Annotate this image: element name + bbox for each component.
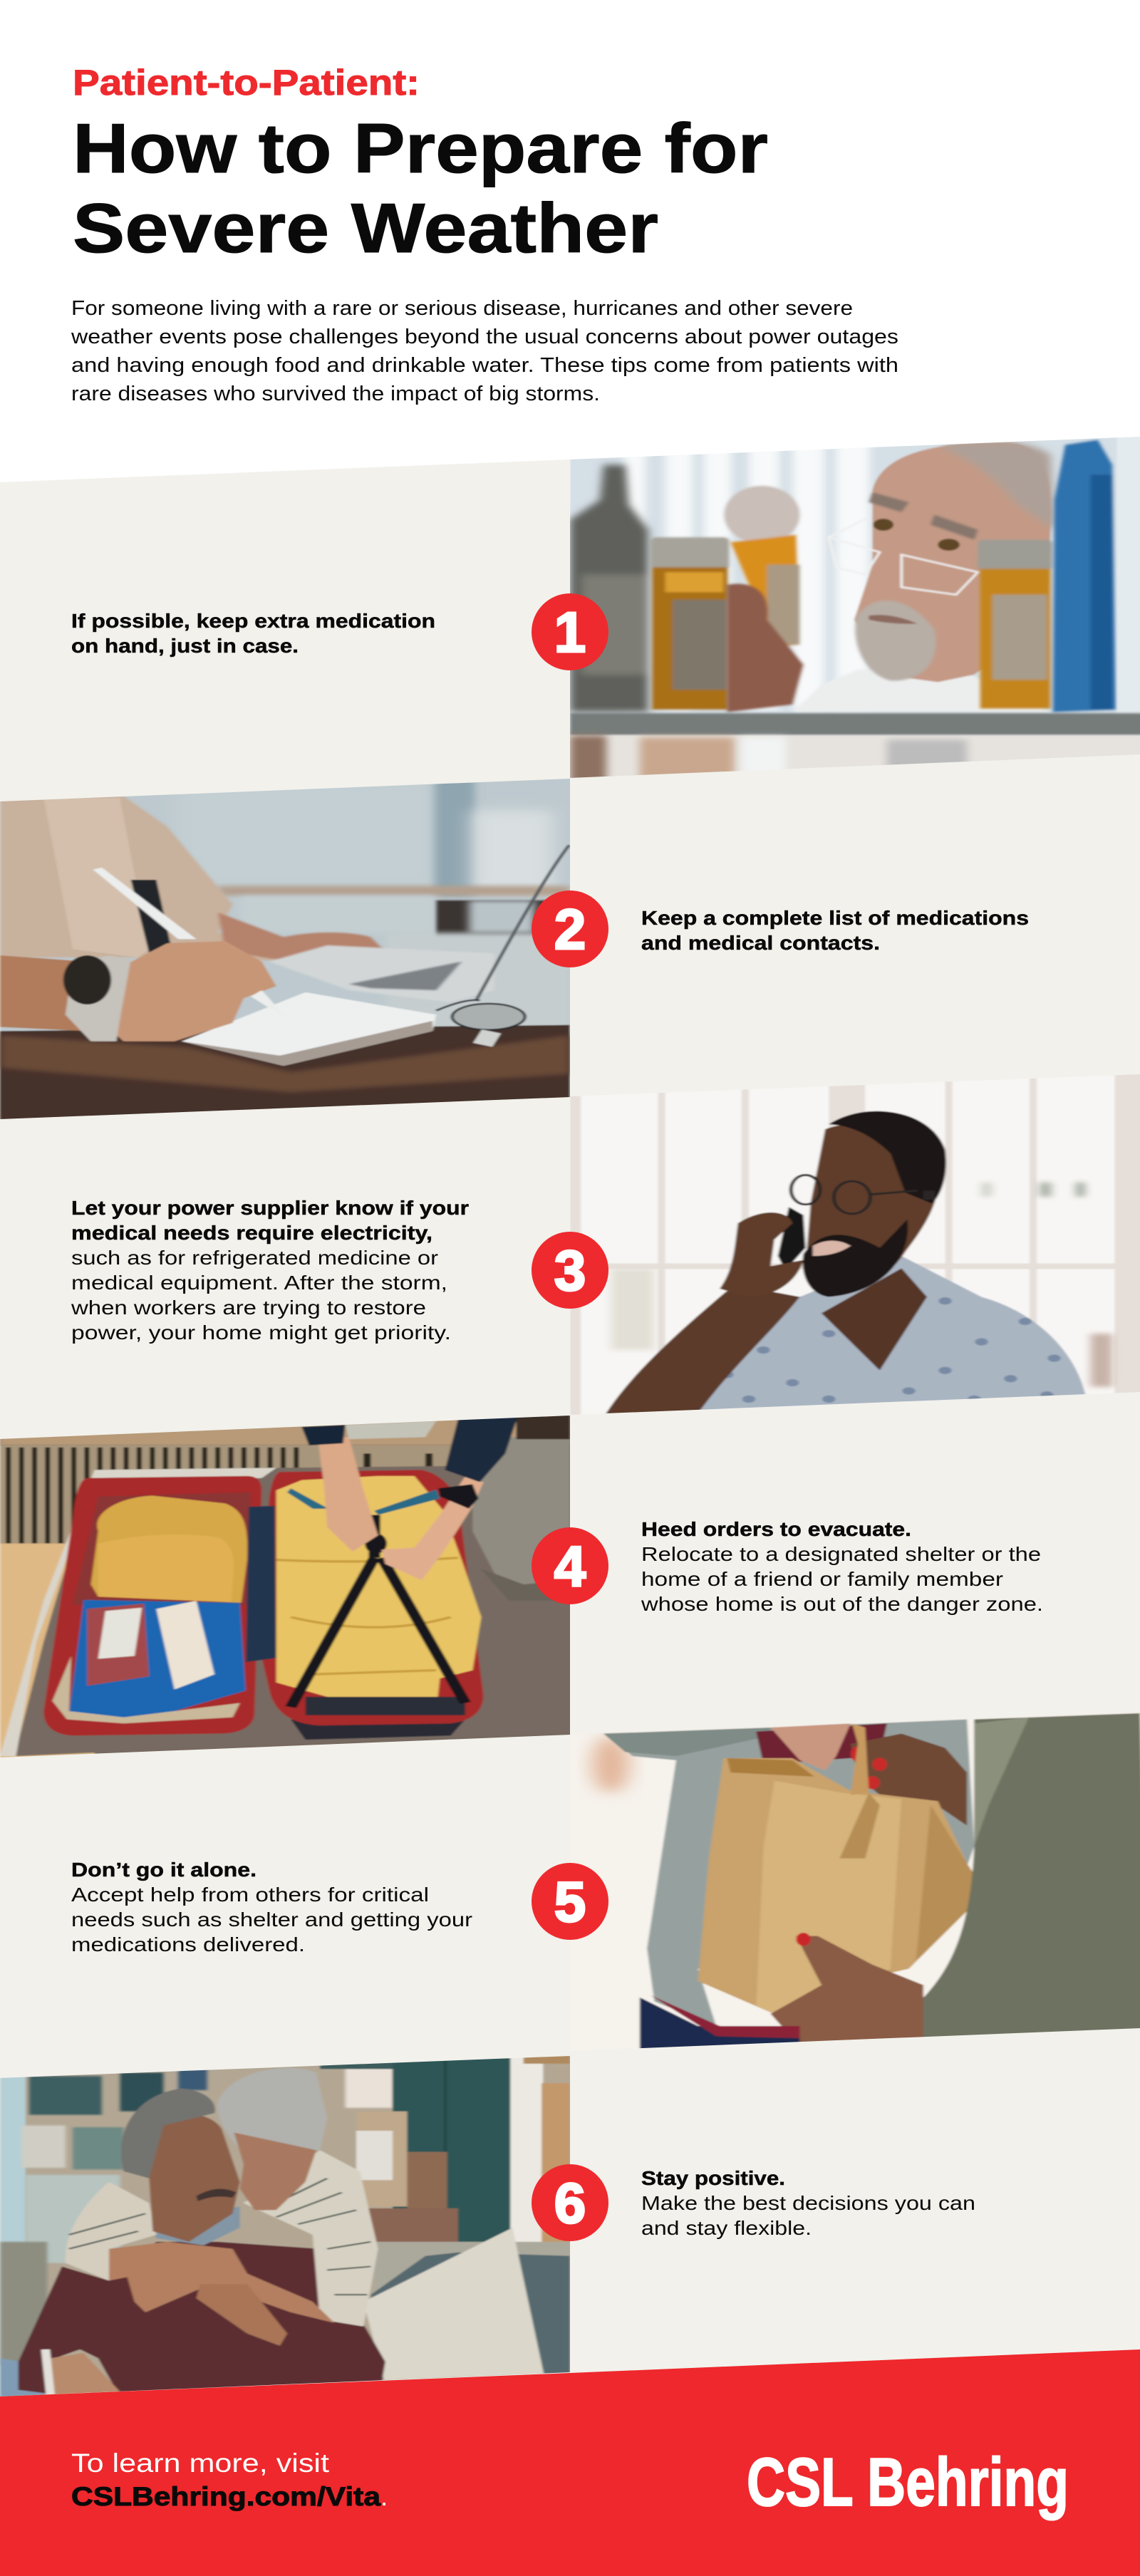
tip 6 text: Stay positive. (641, 2167, 785, 2189)
tip 4 text: whose home is out of the danger zone. (641, 1593, 1043, 1615)
number badge 5 (532, 1863, 608, 1940)
tip 3 text (71, 1197, 469, 1344)
number badge 5: 5 (554, 1870, 586, 1933)
header (71, 63, 898, 405)
tip 2 text: and medical contacts. (641, 932, 880, 954)
tip 3 text: medical needs require electricity, (71, 1222, 432, 1244)
number badge 6 (532, 2164, 608, 2241)
tip 1 text: If possible, keep extra medication (71, 610, 435, 632)
intro paragraph: weather events pose challenges beyond the usual concerns about power outages (71, 326, 898, 348)
number badge 4: 4 (554, 1534, 586, 1598)
call to action (71, 2448, 388, 2511)
number badge 1: 1 (554, 601, 586, 664)
tip 3 text: Let your power supplier know if your (71, 1197, 469, 1219)
tip 6 text: and stay flexible. (641, 2217, 812, 2239)
photo 6: older couple embracing (0, 2052, 581, 2404)
tip 4 text (641, 1518, 1043, 1615)
main title: Severe Weather (73, 189, 658, 267)
footer band (0, 2349, 1140, 2576)
number badge 2 (532, 890, 608, 967)
tip 3 text: such as for refrigerated medicine or (71, 1247, 438, 1269)
number badge 1 (532, 593, 608, 670)
tip 6 text: Make the best decisions you can (641, 2192, 975, 2214)
call to action: To learn more, visit (71, 2448, 330, 2478)
call to action: CSLBehring.com/Vita (71, 2482, 380, 2511)
intro paragraph (71, 297, 898, 405)
tip 5 text: needs such as shelter and getting your (71, 1908, 472, 1931)
tip 5 text: Don’t go it alone. (71, 1859, 256, 1881)
main title (73, 109, 768, 267)
call to action: . (380, 2482, 388, 2511)
tip 4 text: home of a friend or family member (641, 1568, 1003, 1590)
tip 3 text: power, your home might get priority. (71, 1321, 451, 1344)
tip 5 text: Accept help from others for critical (71, 1884, 429, 1906)
tip 2 text: Keep a complete list of medications (641, 907, 1029, 929)
photo 5: paper bag handed over (570, 1707, 1140, 2059)
number badge 6: 6 (554, 2171, 586, 2235)
photo 3: man on the phone (570, 1072, 1140, 1423)
tip 1 text: on hand, just in case. (71, 635, 299, 657)
tip 6 text (641, 2167, 975, 2239)
number badge 3: 3 (554, 1239, 586, 1302)
main title: How to Prepare for (73, 109, 768, 187)
tip 3 text: when workers are trying to restore (71, 1297, 426, 1319)
tip 4 text: Relocate to a designated shelter or the (641, 1543, 1041, 1565)
number badge 4 (532, 1527, 608, 1604)
panel background (0, 437, 1140, 2396)
number badge 2: 2 (554, 898, 586, 961)
photo 4: packed red suitcase (0, 1408, 581, 1765)
intro paragraph: For someone living with a rare or serious disease, hurricanes and other severe (71, 297, 853, 320)
tip 2 text (641, 907, 1029, 954)
intro paragraph: and having enough food and drinkable water. These tips come from patients with (71, 354, 898, 377)
tip 3 text: medical equipment. After the storm, (71, 1272, 447, 1294)
number badge 3 (532, 1232, 608, 1309)
tip 5 text (71, 1859, 472, 1956)
photo 1: man inspecting medication bottles (570, 430, 1140, 789)
tip 4 text: Heed orders to evacuate. (641, 1518, 911, 1540)
intro paragraph: rare diseases who survived the impact of big storms. (71, 383, 600, 405)
photo 2: hand writing in a notebook (0, 769, 581, 1138)
tip 5 text: medications delivered. (71, 1933, 305, 1956)
kicker heading: Patient-to-Patient: (73, 63, 420, 103)
tip 1 text (71, 610, 435, 657)
